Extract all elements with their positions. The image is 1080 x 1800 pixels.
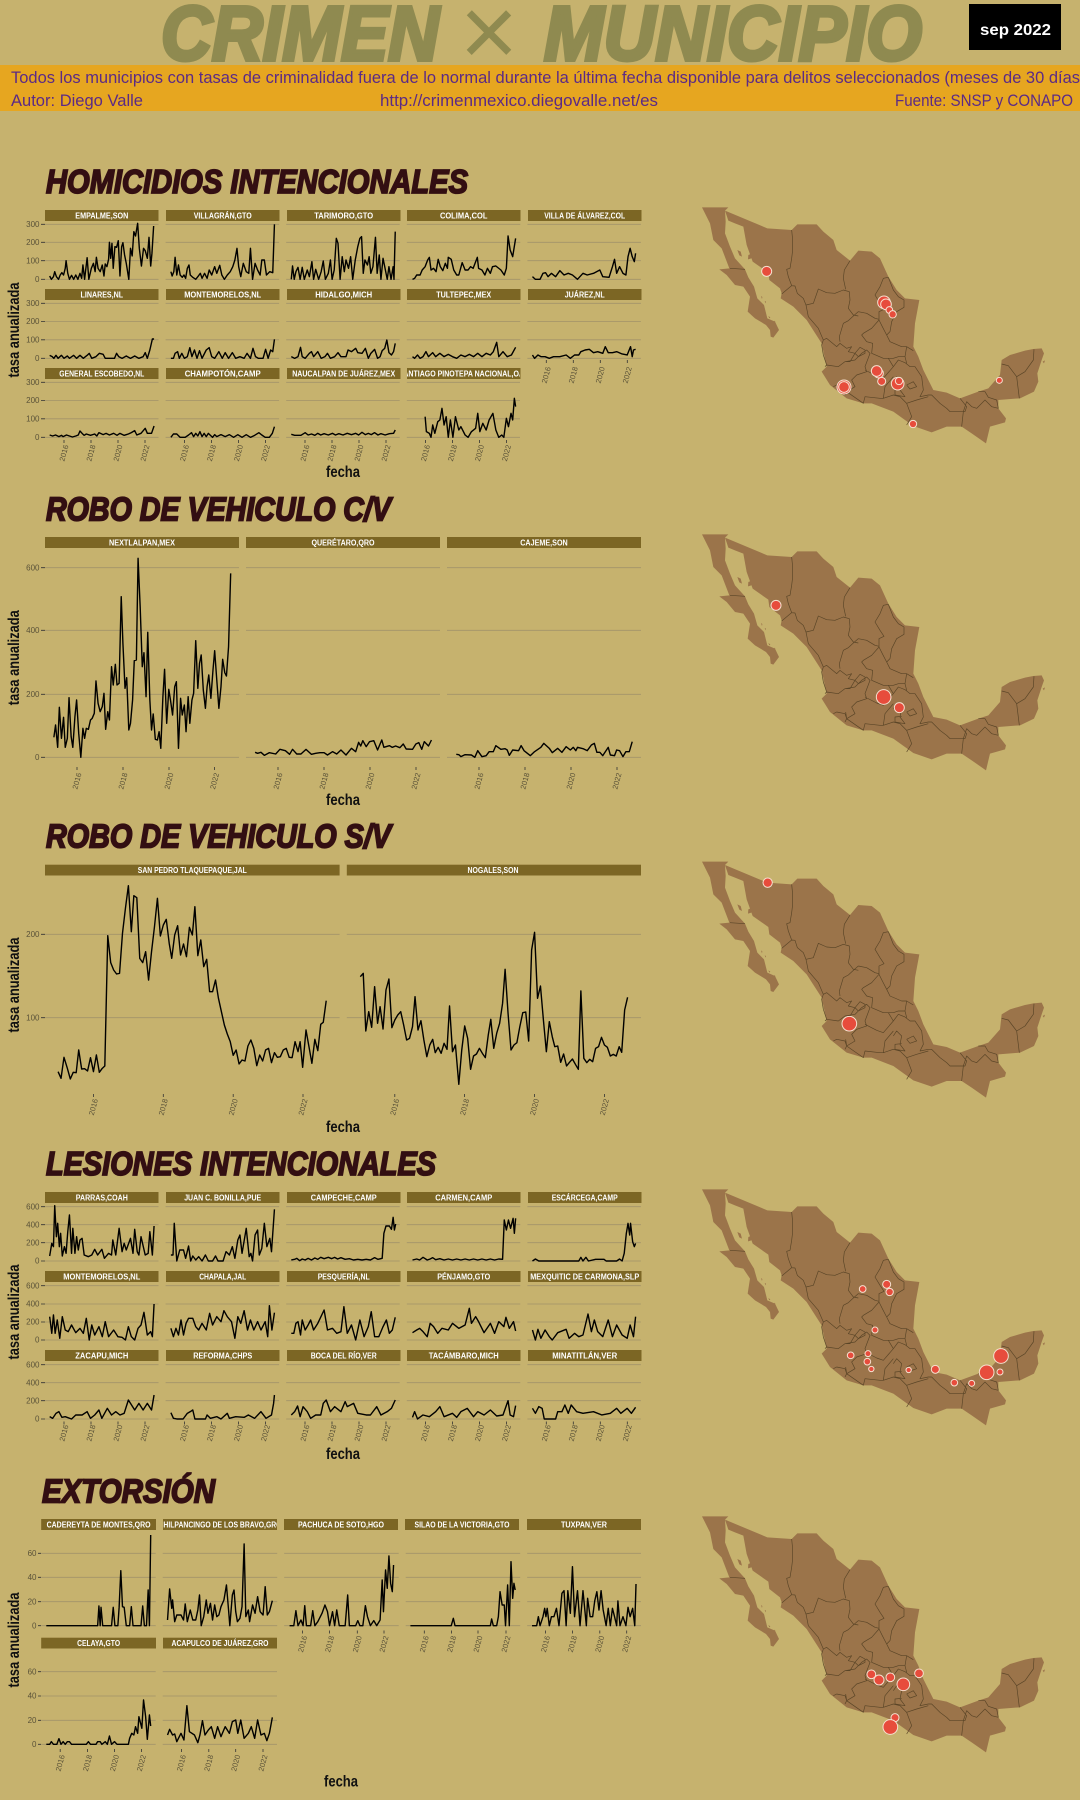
panel: Pachuca de Soto xyxy=(284,1519,398,1653)
panel: Nextlalpan: NEXTLALPAN,MEX xyxy=(109,538,176,547)
panel: Champotón xyxy=(166,368,280,462)
y axis ticks: 300 xyxy=(26,378,40,387)
panel: Pesquería xyxy=(287,1271,400,1340)
panel: General Escobedo: 2020 xyxy=(111,444,125,462)
panel: Colima xyxy=(407,210,520,279)
panel: Villa de Álvarez xyxy=(528,210,642,279)
panel: Juárez: JUÁREZ,NL xyxy=(565,290,605,299)
panel: Reforma: 2020 xyxy=(232,1424,245,1442)
panel: Campeche xyxy=(287,1192,400,1261)
panel: Celaya: CELAYA,GTO xyxy=(77,1639,120,1648)
panel: Celaya: 2016 xyxy=(54,1754,67,1772)
panel: Acapulco de Juárez: ACAPULCO DE JUÁREZ,GRO xyxy=(172,1639,268,1648)
map: extorsión xyxy=(702,1516,1045,1752)
panel: Reforma: 2016 xyxy=(178,1424,191,1442)
y axis ticks: 600 xyxy=(26,563,40,572)
y axis ticks: 400 xyxy=(26,1220,40,1229)
panel: Nextlalpan: 2016 xyxy=(70,772,84,790)
panel: Nextlalpan: 2022 xyxy=(208,772,221,790)
chart group: extorsión xyxy=(6,1519,641,1791)
panel: General Escobedo: 2016 xyxy=(57,444,71,462)
y axis ticks: 0 xyxy=(35,1257,40,1266)
y axis ticks: 40 xyxy=(28,1573,37,1582)
panel: Campeche: CAMPECHE,CAMP xyxy=(311,1193,377,1202)
y axis ticks: 300 xyxy=(26,299,40,308)
y axis ticks xyxy=(26,1202,45,1424)
panel: Naucalpan: 2018 xyxy=(325,444,339,462)
panel: Chilpancingo xyxy=(158,1519,282,1626)
panel: Silao de la Victoria: 2020 xyxy=(471,1635,485,1653)
panel: Tuxpan: 2016 xyxy=(539,1635,552,1653)
y axis ticks: 0 xyxy=(35,1415,40,1424)
y axis ticks: 0 xyxy=(35,753,40,762)
panel: Juan C. Bonilla: JUAN C. BONILLA,PUE xyxy=(184,1193,262,1202)
y axis ticks: 0 xyxy=(35,275,40,284)
panel: Acapulco de Juárez xyxy=(163,1638,277,1772)
panel: Zacapu: 2020 xyxy=(111,1424,125,1442)
panel: Nogales: 2020 xyxy=(528,1098,541,1116)
panel: Tarimoro xyxy=(287,210,400,279)
title xyxy=(161,0,922,88)
panel: General Escobedo: 2022 xyxy=(138,444,152,462)
heading: extorsión: EXTORSIÓN xyxy=(42,1472,216,1509)
panel: Naucalpan: NAUCALPAN DE JUÁREZ,MEX xyxy=(292,369,396,378)
panel: Pachuca de Soto: 2022 xyxy=(377,1635,391,1653)
date badge xyxy=(969,4,1061,50)
panel: Acapulco de Juárez: 2022 xyxy=(256,1754,270,1772)
map: robo s/v xyxy=(702,862,1045,1098)
panel: Minatitlán: 2020 xyxy=(594,1424,607,1442)
map: homicidios xyxy=(702,207,1045,443)
panel: Nogales: NOGALES,SON xyxy=(468,866,519,875)
panel: Pachuca de Soto: PACHUCA DE SOTO,HGO xyxy=(298,1520,384,1529)
heading: homicidios intencionales: HOMICIDIOS INTENCIONALES xyxy=(46,163,468,200)
panel: Tuxpan: 2020 xyxy=(593,1635,606,1653)
map: lesiones xyxy=(702,1189,1045,1425)
y axis ticks: 400 xyxy=(26,626,40,635)
y axis ticks xyxy=(28,1549,41,1749)
y axis ticks: 40 xyxy=(28,1692,37,1701)
panel: Montemorelos xyxy=(166,289,280,358)
panel: Parras xyxy=(45,1192,158,1258)
panel: Hidalgo xyxy=(287,289,400,358)
panel: Boca del Río: 2020 xyxy=(352,1424,366,1442)
panel: Pachuca de Soto: 2018 xyxy=(323,1635,336,1653)
panel: Empalme xyxy=(45,210,158,279)
panel: Nogales: 2022 xyxy=(598,1098,611,1116)
panel: Tacámbaro: 2020 xyxy=(473,1424,486,1442)
panel: Reforma xyxy=(166,1350,280,1442)
panel: San Pedro Tlaquepaque: SAN PEDRO TLAQUEPAQUE,JAL xyxy=(138,866,247,875)
heading: robo de vehiculo s/v: ROBO DE VEHICULO S/V xyxy=(46,818,394,854)
panel: Pachuca de Soto: 2016 xyxy=(296,1635,309,1653)
panel: Juárez: 2018 xyxy=(567,366,580,384)
panel: Zacapu: ZACAPU,MICH xyxy=(75,1351,129,1360)
panel: Naucalpan xyxy=(287,368,400,462)
panel: Silao de la Victoria xyxy=(405,1519,519,1653)
panel: Zacapu: 2016 xyxy=(57,1424,71,1442)
date badge: sep 2022 xyxy=(980,22,1051,39)
panel: Naucalpan: 2016 xyxy=(298,444,312,462)
y axis ticks xyxy=(26,930,45,1022)
panel: Silao de la Victoria: SILAO DE LA VICTORIA,GTO xyxy=(414,1520,510,1529)
chart group: robo s/v xyxy=(6,865,641,1136)
y axis ticks: 100 xyxy=(26,414,40,424)
chart group: robo c/v xyxy=(6,537,641,809)
panel: Nogales xyxy=(347,865,641,1116)
panel: Cajeme: 2022 xyxy=(610,772,624,790)
panel: Mexquitic de Carmona: MEXQUITIC DE CARMONA,SLP xyxy=(530,1272,640,1281)
panel: Villagrán xyxy=(166,210,280,279)
y axis ticks: 200 xyxy=(26,1238,40,1247)
panel: Reforma: REFORMA,CHPS xyxy=(193,1351,253,1360)
y axis title: tasa anualizada xyxy=(6,282,23,378)
panel: Querétaro: 2018 xyxy=(317,772,331,790)
y axis ticks: 200 xyxy=(26,396,40,405)
panel: Naucalpan: 2020 xyxy=(352,444,366,462)
panel: Parras: PARRAS,COAH xyxy=(76,1193,128,1202)
panel: Minatitlán: 2018 xyxy=(567,1424,580,1442)
panel: Juan C. Bonilla xyxy=(166,1192,280,1261)
y axis ticks: 200 xyxy=(26,930,40,939)
panel: Montemorelos lesiones: MONTEMORELOS,NL xyxy=(63,1272,140,1281)
panel: Chapala xyxy=(166,1271,280,1338)
y axis ticks: 100 xyxy=(26,256,40,265)
panel: Reforma: 2018 xyxy=(205,1424,218,1442)
panel: Celaya: 2022 xyxy=(135,1754,148,1772)
panel: Carmen xyxy=(407,1192,520,1260)
y axis ticks: 100 xyxy=(26,1013,40,1022)
panel: Nextlalpan xyxy=(45,537,239,790)
panel: Minatitlán: 2022 xyxy=(621,1424,634,1442)
y axis ticks: 200 xyxy=(26,690,40,699)
heading: robo de vehiculo c/v: ROBO DE VEHICULO C/V xyxy=(46,491,394,528)
panel: Naucalpan: 2022 xyxy=(379,444,393,462)
heading: lesiones intencionales: LESIONES INTENCIONALES xyxy=(46,1145,436,1182)
panel: Juárez: 2022 xyxy=(621,366,634,384)
description banner: Autor: Diego Valle xyxy=(11,91,143,110)
panel: Pesquería: PESQUERÍA,NL xyxy=(318,1272,370,1281)
panel: Pachuca de Soto: 2020 xyxy=(351,1635,364,1653)
panel: Acapulco de Juárez: 2018 xyxy=(202,1754,215,1772)
panel: Tuxpan: 2018 xyxy=(566,1635,579,1653)
panel: Boca del Río xyxy=(287,1350,400,1442)
panel: Tacámbaro xyxy=(407,1350,520,1442)
panel: Linares: LINARES,NL xyxy=(81,290,123,299)
panel: Empalme: EMPALME,SON xyxy=(75,211,128,220)
description banner xyxy=(0,65,1080,111)
y axis title: tasa anualizada xyxy=(6,610,23,705)
panel: Zacapu: 2022 xyxy=(138,1424,152,1442)
panel: Montemorelos: MONTEMORELOS,NL xyxy=(184,290,261,299)
panel: Tultepec: TULTEPEC,MEX xyxy=(436,290,492,299)
panel: Pénjamo: PÉNJAMO,GTO xyxy=(437,1272,490,1281)
map: robo c/v xyxy=(702,534,1045,770)
y axis ticks: 200 xyxy=(26,1318,40,1327)
y axis ticks: 200 xyxy=(26,1396,40,1405)
panel: Tacámbaro: 2022 xyxy=(500,1424,513,1442)
panel: General Escobedo: GENERAL ESCOBEDO,NL xyxy=(59,369,144,378)
y axis ticks: 600 xyxy=(26,1202,40,1211)
panel: Silao de la Victoria: 2022 xyxy=(499,1635,513,1653)
panel: Nogales: 2018 xyxy=(458,1098,471,1116)
panel: San Pedro Tlaquepaque: 2018 xyxy=(157,1098,170,1116)
panel: Mexquitic de Carmona xyxy=(528,1271,642,1340)
y axis ticks: 60 xyxy=(28,1549,37,1558)
panel: Chapala: CHAPALA,JAL xyxy=(199,1272,246,1281)
panel: Querétaro: 2022 xyxy=(409,772,423,790)
panel: Celaya: 2018 xyxy=(81,1754,94,1772)
panel: Cajeme: 2020 xyxy=(564,772,578,790)
panel: Villa de Álvarez: VILLA DE ÁLVAREZ,COL xyxy=(544,211,625,220)
y axis ticks: 100 xyxy=(26,336,40,344)
panel: Acapulco de Juárez: 2020 xyxy=(229,1754,242,1772)
panel: Champotón: 2016 xyxy=(178,444,191,462)
panel: Santiago Pinotepa Nacional: SANTIAGO PINOTEPA NACIONAL,OAX xyxy=(399,369,529,378)
panel: Boca del Río: 2016 xyxy=(298,1424,312,1442)
panel: Champotón: 2020 xyxy=(232,444,245,462)
x axis title: fecha xyxy=(326,1119,360,1136)
y axis ticks: 600 xyxy=(26,1281,40,1290)
panel: Pénjamo xyxy=(407,1271,520,1337)
x axis title: fecha xyxy=(324,1774,358,1791)
panel: Santiago Pinotepa Nacional: 2018 xyxy=(446,444,459,462)
y axis ticks: 60 xyxy=(28,1667,37,1676)
x axis title: fecha xyxy=(326,792,360,809)
panel: General Escobedo: 2018 xyxy=(84,444,98,462)
panel: Linares xyxy=(45,289,158,358)
panel: Tacámbaro: 2016 xyxy=(419,1424,432,1442)
panel: San Pedro Tlaquepaque: 2016 xyxy=(87,1098,100,1116)
panel: Champotón: CHAMPOTÓN,CAMP xyxy=(185,369,261,378)
y axis ticks: 200 xyxy=(26,238,40,247)
panel: Santiago Pinotepa Nacional xyxy=(407,368,520,462)
panel: Cadereyta de Montes: CADEREYTA DE MONTES,QRO xyxy=(47,1520,151,1529)
y axis ticks xyxy=(26,220,45,442)
panel: Chilpancingo: CHILPANCINGO DE LOS BRAVO,GRO xyxy=(158,1520,282,1529)
panel: Querétaro: QUERÉTARO,QRO xyxy=(312,538,374,547)
panel: San Pedro Tlaquepaque: 2022 xyxy=(296,1098,310,1116)
panel: Juárez xyxy=(528,289,642,384)
panel: Querétaro: 2020 xyxy=(363,772,377,790)
y axis ticks xyxy=(26,563,45,762)
panel: Carmen: CARMEN,CAMP xyxy=(435,1193,493,1202)
panel: Santiago Pinotepa Nacional: 2016 xyxy=(419,444,432,462)
y axis ticks: 600 xyxy=(26,1360,40,1369)
panel: Villagrán: VILLAGRÁN,GTO xyxy=(194,211,252,220)
panel: Tacámbaro: TACÁMBARO,MICH xyxy=(429,1351,499,1360)
panel: Silao de la Victoria: 2016 xyxy=(418,1635,431,1653)
panel: Celaya: 2020 xyxy=(108,1754,121,1772)
panel: Hidalgo: HIDALGO,MICH xyxy=(315,290,372,299)
y axis title: tasa anualizada xyxy=(6,1592,23,1688)
y axis ticks: 200 xyxy=(26,317,40,326)
panel: Acapulco de Juárez: 2016 xyxy=(175,1754,188,1772)
panel: General Escobedo xyxy=(45,368,158,462)
panel: Tuxpan xyxy=(527,1519,641,1653)
panel: Colima: COLIMA,COL xyxy=(440,211,488,220)
panel: Santiago Pinotepa Nacional: 2022 xyxy=(500,444,513,462)
panel: Tarimoro: TARIMORO,GTO xyxy=(314,211,373,220)
chart group: lesiones xyxy=(6,1192,642,1463)
panel: Cajeme: 2016 xyxy=(472,772,486,790)
y axis ticks: 300 xyxy=(26,220,40,229)
panel: Silao de la Victoria: 2018 xyxy=(445,1635,458,1653)
x axis title: fecha xyxy=(326,464,360,481)
panel: Zacapu: 2018 xyxy=(84,1424,98,1442)
chart group: homicidios xyxy=(6,210,642,481)
panel: Tuxpan: TUXPAN,VER xyxy=(561,1520,607,1529)
y axis ticks: 0 xyxy=(35,433,40,442)
panel: Minatitlán: MINATITLÁN,VER xyxy=(552,1351,617,1360)
y axis ticks: 400 xyxy=(26,1378,40,1387)
panel: Querétaro: 2016 xyxy=(271,772,285,790)
panel: Tuxpan: 2022 xyxy=(620,1635,633,1653)
y axis ticks: 0 xyxy=(35,354,40,363)
panel: San Pedro Tlaquepaque: 2020 xyxy=(227,1098,240,1116)
panel: Juárez: 2016 xyxy=(540,366,553,384)
description banner: http://crimenmexico.diegovalle.net/es xyxy=(380,91,658,110)
panel: Cajeme: 2018 xyxy=(518,772,532,790)
panel: San Pedro Tlaquepaque xyxy=(45,865,340,1116)
y axis title: tasa anualizada xyxy=(6,1264,23,1360)
panel: Nextlalpan: 2020 xyxy=(162,772,176,790)
panel: Celaya xyxy=(41,1638,156,1772)
panel: Champotón: 2018 xyxy=(205,444,218,462)
y axis ticks: 20 xyxy=(28,1597,37,1606)
panel: Santiago Pinotepa Nacional: 2020 xyxy=(473,444,486,462)
panel: Cajeme: CAJEME,SON xyxy=(520,538,568,547)
panel: Nextlalpan: 2018 xyxy=(116,772,130,790)
panel: Nogales: 2016 xyxy=(388,1098,401,1116)
panel: Cadereyta de Montes xyxy=(41,1519,156,1626)
y axis ticks: 0 xyxy=(32,1740,37,1749)
panel: Tultepec xyxy=(407,289,520,358)
panel: Zacapu xyxy=(45,1350,158,1442)
panel: Boca del Río: 2018 xyxy=(325,1424,339,1442)
panel: Reforma: 2022 xyxy=(259,1424,272,1442)
panel: Montemorelos lesiones xyxy=(45,1271,158,1340)
panel: Juárez: 2020 xyxy=(594,366,607,384)
panel: Querétaro xyxy=(246,537,440,790)
panel: Cajeme xyxy=(447,537,641,790)
panel: Tacámbaro: 2018 xyxy=(446,1424,459,1442)
panel: Minatitlán xyxy=(528,1350,642,1442)
y axis title: tasa anualizada xyxy=(6,937,23,1032)
y axis ticks: 0 xyxy=(32,1621,37,1630)
panel: Boca del Río: 2022 xyxy=(379,1424,393,1442)
panel: Escárcega xyxy=(528,1192,642,1261)
panel: Escárcega: ESCÁRCEGA,CAMP xyxy=(552,1193,618,1202)
panel: Champotón: 2022 xyxy=(259,444,272,462)
panel: Minatitlán: 2016 xyxy=(540,1424,553,1442)
y axis ticks: 20 xyxy=(28,1716,37,1725)
y axis ticks: 400 xyxy=(26,1300,40,1309)
panel: Boca del Río: BOCA DEL RÍO,VER xyxy=(311,1351,377,1360)
y axis ticks: 0 xyxy=(35,1336,40,1345)
x axis title: fecha xyxy=(326,1446,360,1463)
